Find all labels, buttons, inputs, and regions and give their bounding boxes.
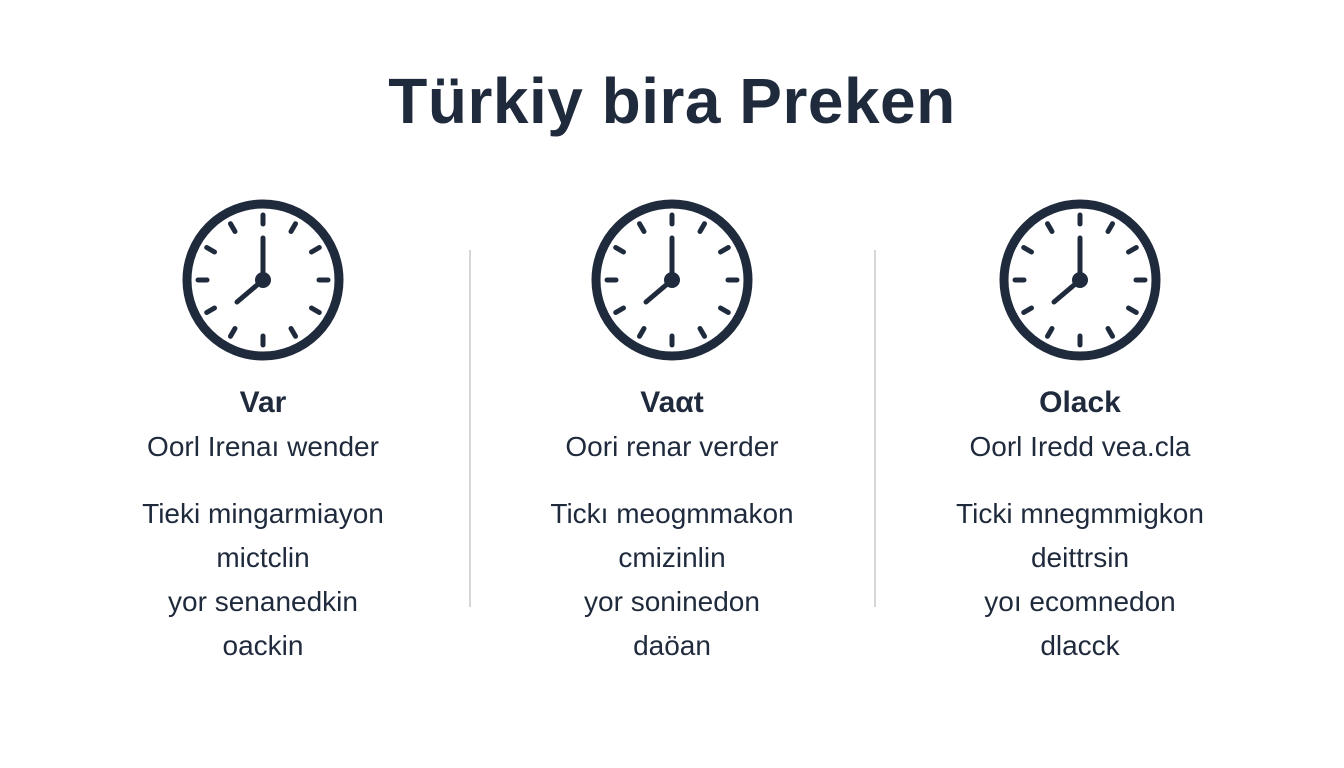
heading: Olack <box>1039 386 1121 419</box>
heading: Var <box>240 386 286 419</box>
body text: dlacck <box>1040 630 1120 661</box>
body text: Tickı meogmmakon <box>550 498 794 529</box>
body text: mictclin <box>216 542 310 573</box>
body text: yoı ecomnedon <box>984 586 1176 617</box>
body text: daöan <box>633 630 711 661</box>
body text: yor soninedon <box>584 586 760 617</box>
heading: Vaαt <box>640 386 704 419</box>
body text: oackin <box>223 630 303 661</box>
panel: Vaat <box>550 200 794 661</box>
subtitle: Oorl Irenaı wender <box>147 431 379 462</box>
body text: deittrsin <box>1031 542 1129 573</box>
body text: Tieki mingarmiayon <box>142 498 384 529</box>
panel: Var <box>142 200 384 661</box>
icon: clock <box>182 200 344 360</box>
body text: Ticki mnegmmigkon <box>956 498 1204 529</box>
panel: Olack <box>956 200 1204 661</box>
body text <box>956 498 1204 661</box>
body text: yor senanedkin <box>168 586 358 617</box>
title: Türkiy bira Preken <box>388 65 956 137</box>
body text <box>550 498 794 661</box>
icon: clock <box>1000 200 1160 360</box>
subtitle: Oorl Iredd vea.cla <box>970 431 1190 462</box>
subtitle: Oori renar verder <box>565 431 779 462</box>
icon: clock <box>592 200 752 360</box>
body text <box>142 498 384 661</box>
body text: cmizinlin <box>618 542 726 573</box>
